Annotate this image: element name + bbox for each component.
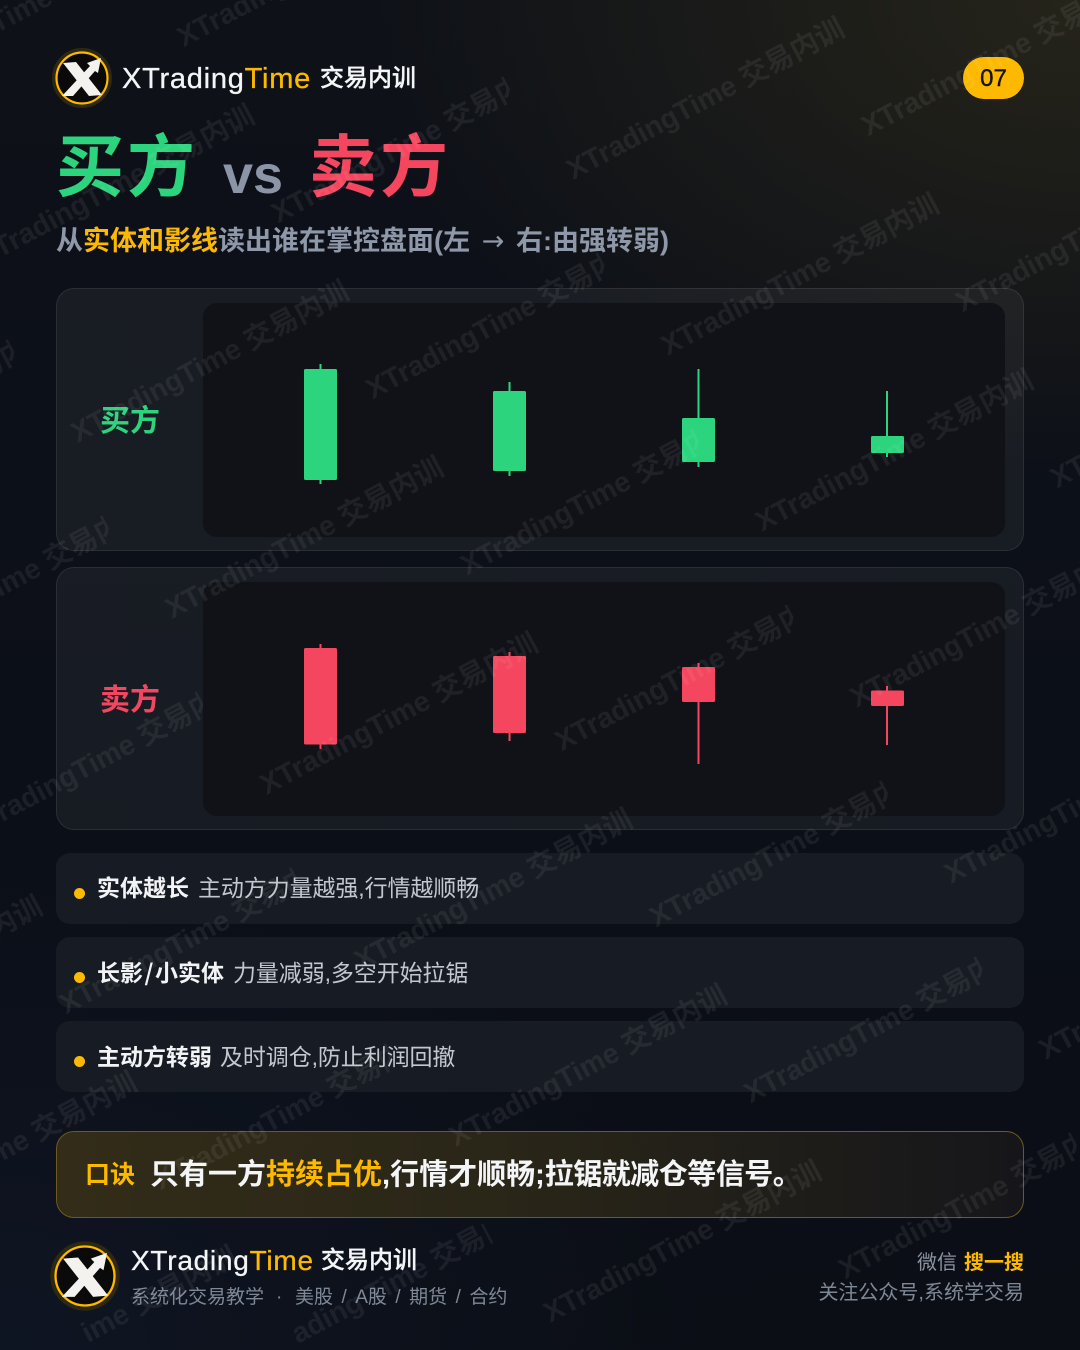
watermark layer: ime 交易内训: [76, 1241, 242, 1349]
watermark layer: XTradingTime 交易内训: [561, 12, 850, 186]
chart area: buyers: [203, 303, 1005, 537]
tip 1 text: 实体越长 主动方力量越强,行情越顺畅: [97, 875, 479, 901]
watermark layer: XTradingTime 交易内训: [266, 56, 555, 230]
row: tip 2: [56, 937, 1024, 1008]
bullet 2: [74, 972, 85, 983]
watermark layer: XTradingTime 交易内训: [66, 275, 354, 449]
title: [56, 130, 451, 206]
watermark layer: XTradingTime 交易内训: [444, 979, 732, 1153]
watermark layer: XTradingTime 交易内训: [538, 1155, 827, 1329]
watermark layer: XTradingTime 交易内训: [739, 936, 1027, 1110]
watermark layer: XTradingTime 交易内训: [255, 627, 543, 801]
title: 卖方: [309, 130, 451, 206]
header brand text: XTradingTime: [122, 63, 311, 95]
tip 2 text: 长影 小实体 力量减弱,多空开始拉锯: [97, 960, 468, 986]
footer brand text: [131, 1245, 417, 1276]
row: tip 3: [56, 1021, 1024, 1092]
text: 美股 / A股 / 期货 / 合约: [295, 1287, 507, 1308]
badge: page number: 07: [980, 65, 1007, 92]
row: tip 1: [56, 853, 1024, 924]
footer brand text: XTradingTime: [131, 1245, 314, 1276]
badge: page number: [963, 57, 1024, 99]
callout: mnemonic: [56, 1131, 1024, 1218]
watermark layer: XTradingTime 交易内训: [750, 364, 1039, 538]
watermark layer: XTradingTime 交易内训: [644, 760, 933, 934]
watermark layer: XTradingTime 交易内训: [455, 408, 744, 582]
footer right: follow text: 关注公众号,系统学交易: [818, 1282, 1024, 1304]
panel: buyers: [56, 288, 1024, 551]
watermark layer: XTradingTime 交易内训: [160, 451, 449, 625]
bullet 3: [74, 1056, 85, 1067]
label: sellers: 卖方: [100, 684, 160, 717]
label: buyers: 买方: [100, 405, 160, 438]
tip 3 text: 主动方转弱 及时调仓,防止利润回撤: [97, 1044, 455, 1070]
text: 交易内训: [320, 65, 416, 92]
header brand text: [122, 63, 416, 95]
bullet 1: [74, 888, 85, 899]
watermark layer: XTradingTime 交易内训: [149, 1023, 437, 1197]
text: ·: [276, 1287, 282, 1308]
text: 交易内训: [321, 1247, 417, 1274]
footer tagline: 系统化交易教学: [131, 1287, 264, 1308]
watermark layer: XTradingTime 交易内训: [361, 232, 649, 406]
title: vs: [223, 145, 283, 205]
watermark layer: XTradingTime 交易内训: [54, 847, 343, 1021]
footer tagline: [131, 1286, 507, 1308]
watermark layer: XTradingTime 交易内训: [656, 188, 944, 362]
watermark layer: XTradingTime 交易内训: [550, 584, 838, 758]
subtitle: →: [482, 226, 504, 257]
footer right: wechat search: 微信 搜一搜: [917, 1252, 1024, 1274]
title: 买方: [56, 130, 198, 206]
callout: mnemonic: 只有一方持续占优,行情才顺畅;拉锯就减仓等信号。: [150, 1159, 802, 1191]
panel: sellers: [56, 567, 1024, 830]
chart area: sellers: [203, 582, 1005, 816]
logo: header: [52, 48, 112, 108]
watermark layer: XTradingTime 交易内训: [349, 803, 638, 977]
logo: footer: [50, 1242, 120, 1311]
watermark layer: ading Time 交易内训: [286, 1194, 541, 1350]
subtitle: 从实体和影线读出谁在掌控盘面(左 右:由强转弱): [56, 226, 669, 256]
tip 2 text: /: [145, 954, 153, 988]
callout: mnemonic: 口诀: [85, 1161, 135, 1189]
